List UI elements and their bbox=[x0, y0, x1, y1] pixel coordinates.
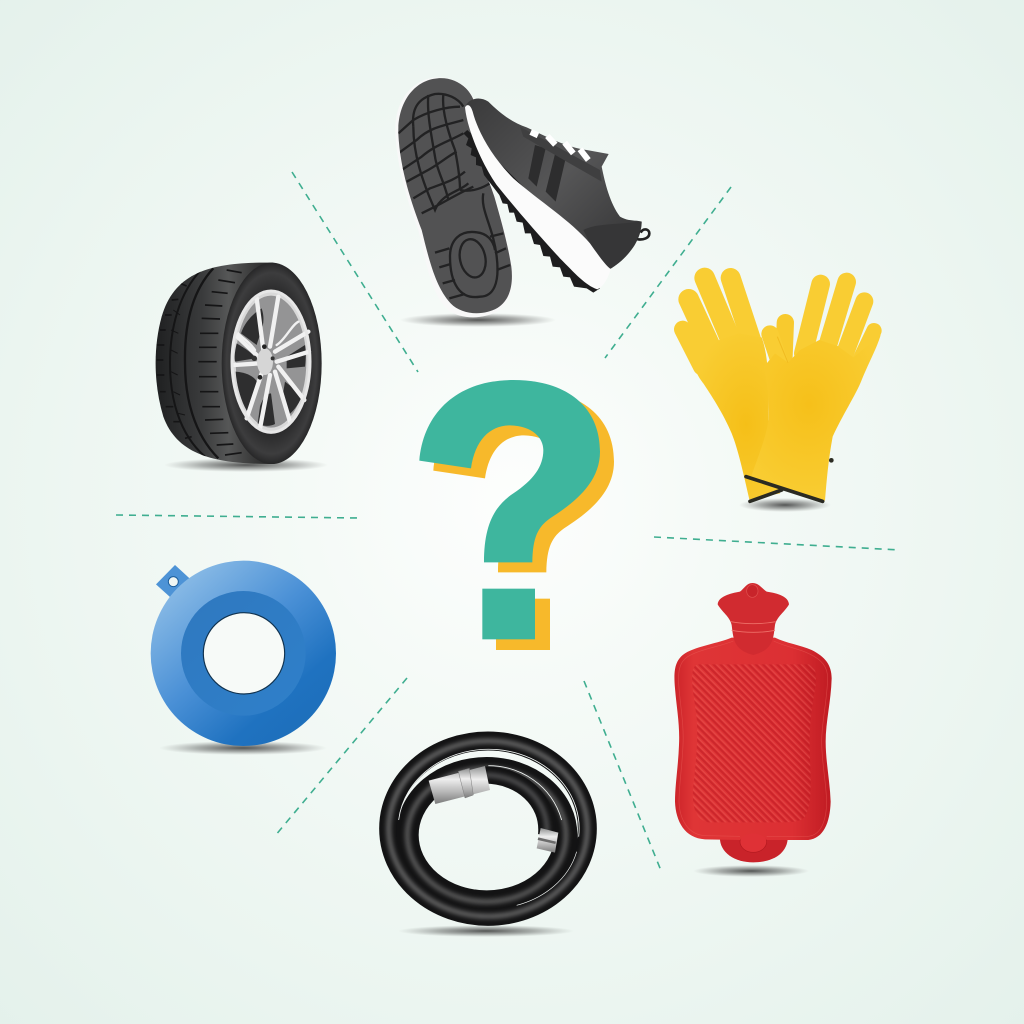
hose end ferrule bbox=[537, 828, 558, 853]
shoe midsole bbox=[465, 105, 611, 289]
alloy wheel bbox=[232, 291, 310, 432]
bottle bottom tab bbox=[720, 831, 788, 862]
shoe tread bbox=[463, 130, 600, 293]
left glove bbox=[683, 278, 780, 499]
dashed dividers bbox=[116, 172, 900, 873]
hose connector bbox=[429, 766, 490, 804]
icon: hot water bottle bbox=[674, 583, 832, 877]
right glove bbox=[750, 282, 881, 501]
infographic canvas bbox=[116, 77, 895, 936]
icon: question mark bbox=[419, 380, 614, 650]
cuff ties bbox=[746, 477, 823, 501]
far thumb bbox=[784, 323, 785, 357]
icon: car tyre bbox=[156, 263, 328, 472]
bottle neck stopper bbox=[718, 583, 789, 655]
shoe sole bbox=[395, 77, 513, 317]
icon: rubber gloves bbox=[683, 278, 881, 512]
icon: coiled rubber hose bbox=[389, 741, 587, 937]
icon: blue rubber ring bbox=[151, 561, 336, 755]
icon: sneakers bbox=[395, 77, 649, 327]
bottle body bbox=[674, 638, 832, 840]
ring tab bbox=[156, 565, 195, 600]
shoe upper bbox=[466, 98, 649, 269]
